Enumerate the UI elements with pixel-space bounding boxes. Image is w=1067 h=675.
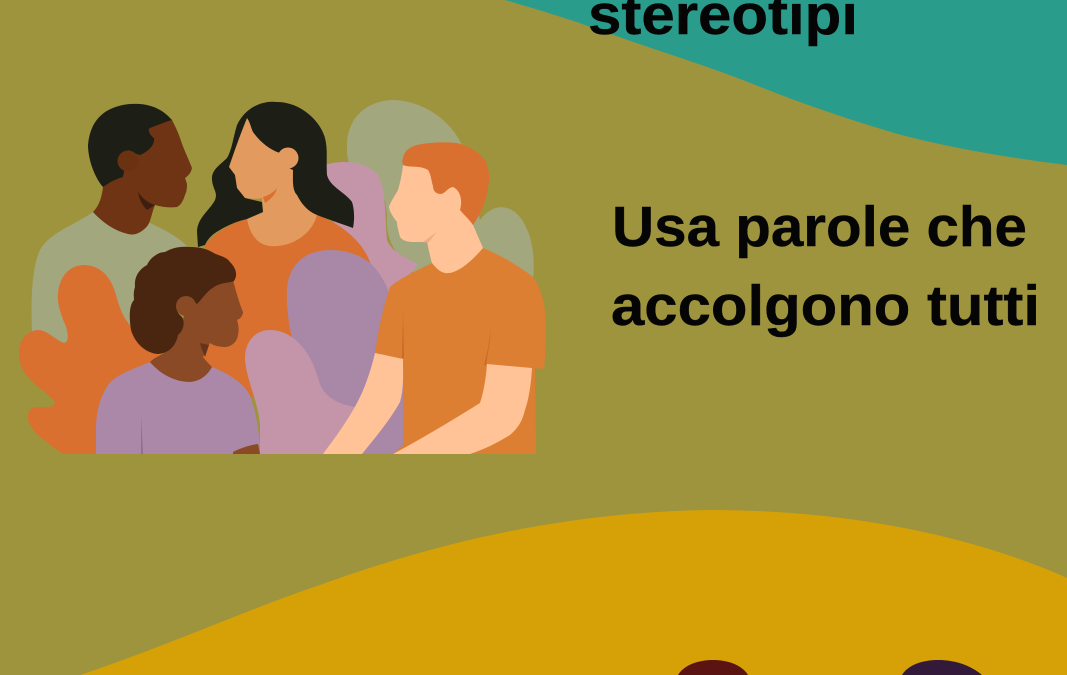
background plants [325, 100, 534, 300]
pink blob lower [245, 330, 362, 454]
main message: accolgono tutti [611, 274, 1040, 338]
teal wave top right [505, 0, 1067, 165]
woman [197, 102, 371, 440]
partial head dark red [678, 660, 748, 675]
man left [32, 104, 192, 350]
partial head dark purple [902, 660, 982, 675]
main message [611, 195, 1040, 338]
leaf orange [19, 265, 170, 454]
child [96, 247, 260, 454]
illustration: group of people [19, 100, 546, 454]
gold wave bottom [80, 510, 1067, 675]
purple blob [287, 250, 405, 454]
man right [323, 142, 546, 454]
main message: Usa parole che [612, 195, 1027, 259]
